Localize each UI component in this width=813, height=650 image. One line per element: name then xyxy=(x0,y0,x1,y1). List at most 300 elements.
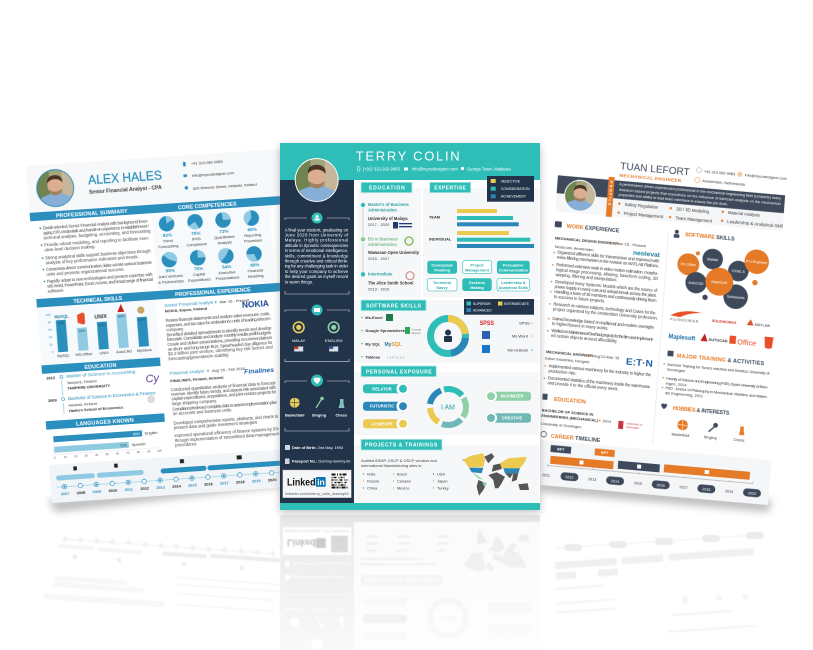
software list left: Google Spreadsheets xyxy=(365,328,407,333)
name: ALEX HALES xyxy=(88,167,163,187)
education timeline: The Alice Smith School xyxy=(368,280,413,285)
skill buttons: Making xyxy=(470,285,484,290)
software skills bubble chart: Ms Office xyxy=(680,262,696,267)
date of birth: Date of Birth: 2nd May. 1993 xyxy=(292,445,343,450)
career timeline chart: 2014 xyxy=(611,479,619,484)
software list right: Ms-Outlook xyxy=(508,348,528,352)
contact details: info@mycvdesigner.com xyxy=(192,170,234,178)
experience entries: large shipping company. xyxy=(172,398,217,406)
logo: Eaton: E:T·N xyxy=(626,356,653,369)
languages bar chart: 0 xyxy=(54,456,56,460)
hobbies icons: Chess xyxy=(733,437,745,443)
technical skills bar chart: 80 xyxy=(48,320,52,324)
software logos xyxy=(668,309,775,349)
career timeline heading: CAREER TIMELINE xyxy=(551,434,601,444)
core competencies labels: 55% xyxy=(165,268,175,273)
expertise bar chart xyxy=(429,209,534,248)
skill buttons: Thinking xyxy=(434,268,451,272)
career timeline chart: BFT xyxy=(601,451,609,455)
major training list xyxy=(661,361,770,404)
professional summary text: Consensus-driven communication, liaise across various business xyxy=(46,260,152,272)
career timeline: 2020 xyxy=(268,477,277,483)
icon: Outlook xyxy=(482,345,490,353)
software legend xyxy=(464,299,534,315)
contact details xyxy=(358,166,511,172)
reflected sidebar items: Singing xyxy=(312,608,327,612)
QR code xyxy=(331,473,348,489)
software skills tab: SOFTWARE SKILLS xyxy=(366,303,422,309)
work experience entries: production rate. xyxy=(548,368,577,376)
heading band: summary and competencies: CORE COMPETENCIES xyxy=(178,201,237,211)
education timeline: Intermediate xyxy=(368,272,393,277)
expertise legend xyxy=(487,176,534,202)
education timeline: Administration xyxy=(368,242,397,247)
career timeline xyxy=(49,448,306,503)
technical skills bar chart: AutoCAD xyxy=(116,349,132,354)
software skills tab xyxy=(361,300,426,311)
skill buttons: Management xyxy=(465,268,490,272)
projects text: Russia xyxy=(367,478,380,483)
shadow: left resume xyxy=(48,478,285,512)
page background xyxy=(505,146,793,505)
core competencies labels: Joint Ventures xyxy=(158,273,183,279)
hobbies icons: Basketball xyxy=(671,431,690,438)
technical skills bar chart: UNIX xyxy=(100,351,109,355)
page background xyxy=(26,149,306,503)
projects text: Turkey xyxy=(437,485,449,490)
core competencies labels: Expenditures xyxy=(188,276,211,283)
software logos: SOLIDWORKS xyxy=(712,319,737,325)
heading band: summary and competencies: PROFESSIONAL SUMMARY xyxy=(56,209,128,219)
reflected projects: USA xyxy=(437,549,445,554)
experience entries: expenses, and tax rates for ambivalence units of leading telecom xyxy=(166,316,271,328)
education timeline: 2015 - 2017 xyxy=(368,256,390,261)
education timeline xyxy=(361,202,420,292)
languages heading xyxy=(46,413,165,430)
software donut chart xyxy=(430,318,466,354)
contact details: George Town, Malaysia xyxy=(467,167,511,172)
skill buttons: Decision xyxy=(469,280,486,285)
technical skills bar chart: MS-Office xyxy=(75,352,92,357)
experience entries: Senior Financial Analyst xyxy=(164,300,214,308)
software list right: SPSS xyxy=(519,320,530,326)
education entries: 2009 xyxy=(48,397,58,403)
languages bar chart xyxy=(52,426,162,460)
education entry: 2014 xyxy=(602,418,612,424)
technical skills bar chart xyxy=(45,302,152,359)
hobbies icons: Singing xyxy=(704,434,717,440)
divider xyxy=(653,233,668,445)
personal traits right xyxy=(485,390,531,424)
career timeline: 2013 xyxy=(156,484,166,490)
icon: MySQL: MySQL xyxy=(54,313,69,319)
career timeline: 2009 xyxy=(92,489,102,494)
reflection: centre resume: PROJECTS & TRAININGS xyxy=(365,576,438,582)
sidebar languages section: MALAY xyxy=(292,338,306,343)
education entry: BACHELOR OF SCIENCE IN xyxy=(542,407,594,417)
skill buttons: Leadership & xyxy=(501,280,526,285)
photo xyxy=(295,158,339,202)
reflected map xyxy=(463,529,529,572)
profile tab xyxy=(606,177,615,217)
skill buttons: Communication xyxy=(499,268,529,272)
heading band: technical skills and experience xyxy=(36,282,291,308)
contact details xyxy=(182,157,257,191)
sidebar profile section: skills, commitment & knowledge xyxy=(285,253,349,258)
core competencies labels: 75% xyxy=(194,266,203,271)
icon: Office xyxy=(77,312,85,325)
expertise bar chart: INDIVIDUAL xyxy=(429,237,452,242)
core competencies labels: Analysis xyxy=(217,239,232,245)
projects and trainings tab xyxy=(361,439,442,450)
work experience entries: Performed extensive work in video motion estimation, morpho- xyxy=(556,262,659,276)
career timeline: 2016 xyxy=(204,481,214,487)
logo: university: Cy xyxy=(145,372,161,385)
experience entries: Financial Analyst xyxy=(169,369,205,376)
profile tab: PROFILE xyxy=(607,181,613,207)
LinkedIn box: linkedin.com/in/terry_colin_dummy00 xyxy=(286,492,349,496)
career timeline: 2019 xyxy=(252,478,262,484)
passport: Passport No.: Dummy.dummy.00 xyxy=(292,458,351,463)
skill buttons xyxy=(427,261,530,291)
core competencies labels: Modeling xyxy=(248,273,264,279)
languages bar chart: Spanish xyxy=(131,441,146,447)
photo xyxy=(563,178,597,213)
projects text: India xyxy=(367,471,376,476)
sidebar xyxy=(280,180,354,503)
languages bar chart: 85% xyxy=(133,432,140,436)
core competencies labels: 82% xyxy=(163,232,172,238)
career timeline: 2011 xyxy=(124,486,134,492)
core competencies pie charts xyxy=(155,207,263,271)
work experience entries: MECHANICAL ENGINEER xyxy=(546,349,594,358)
reflected projects: Mexico xyxy=(397,535,409,540)
major training list: Groningen xyxy=(667,366,686,373)
languages bar chart: 100 xyxy=(157,449,162,453)
projects and trainings tab: PROJECTS & TRAININGS xyxy=(365,443,438,449)
education heading xyxy=(41,357,161,374)
professional summary text: utive-level decision making. xyxy=(44,244,96,252)
sidebar hobbies section: Singing xyxy=(312,412,327,418)
job title: Senior Financial Analyst - CPA xyxy=(89,185,162,196)
work experience entries: Eaton Industries, Hengelo xyxy=(545,355,590,364)
projects text: Brazil xyxy=(397,471,407,476)
personal traits right: MAXIMIZER xyxy=(501,394,524,399)
reflected projects: Audited ASMP, OSCP & OSCP vendors and xyxy=(361,562,437,567)
reflected projects xyxy=(361,535,449,567)
education timeline: Wawasan Open University xyxy=(368,250,420,255)
skill buttons: Conceptual xyxy=(431,262,453,267)
major training list: Faculty of Science and Engineering (FSE); Kyoto University of Bren- xyxy=(666,376,769,390)
logo: Nokia: NOKIA xyxy=(242,299,269,310)
major training list: als Engineering, 2011 xyxy=(665,390,704,399)
software logos: AUTOCAD xyxy=(708,337,728,343)
projects text: Canada xyxy=(397,478,411,483)
software skills bubble chart: Matlab xyxy=(707,257,718,262)
sidebar profile section: attitude in dynamic consequencies xyxy=(285,243,348,248)
education timeline: 2017 - 2020 xyxy=(368,222,390,227)
core competencies labels: IFRS xyxy=(192,236,201,242)
work experience entries xyxy=(543,235,663,395)
reflected traits xyxy=(363,597,531,641)
reflected LinkedIn box: linkedin.com/in/terry_colin_dummy00 xyxy=(286,529,349,533)
software skills bubble chart: AutoCAD xyxy=(688,281,704,286)
sidebar profile section: Malaya. Highly professional xyxy=(285,238,348,243)
shadow: centre resume xyxy=(280,146,540,512)
LinkedIn box xyxy=(283,470,351,498)
software list left xyxy=(361,314,422,360)
software skills bubble chart: HTML 5 xyxy=(732,269,745,274)
work experience entries: logical image processing, aliasing, baseform coding, 2D xyxy=(556,267,658,281)
work experience entries: to success in future projects. xyxy=(554,294,606,304)
core competencies labels: Trend xyxy=(163,238,173,244)
personal traits left: FUTURISTIC xyxy=(370,404,394,409)
logo: University of Malaya xyxy=(393,222,412,228)
sidebar hobbies section: Basketball xyxy=(285,412,304,418)
skill buttons: Savvy xyxy=(436,285,448,290)
software list right: Ms-Word xyxy=(512,334,528,338)
languages bar chart: 20 xyxy=(74,454,78,458)
software logos: Pro/ENGINEER xyxy=(670,317,699,324)
logo: school xyxy=(147,395,155,403)
education entries: Helsinki, Finland xyxy=(68,401,97,408)
software list right xyxy=(480,320,533,353)
software skills bubble chart: Pro Engineer xyxy=(746,259,768,265)
key skills list: Team Management xyxy=(675,215,713,223)
career timeline: 2014 xyxy=(172,483,182,489)
professional summary text: units and promote organizational success. xyxy=(46,267,125,277)
education timeline: University of Malaya xyxy=(368,216,408,221)
software skills heading xyxy=(674,230,735,243)
personal traits left: ACHIEVER xyxy=(371,421,393,426)
professional summary text: Strong analytical skills support business objectives through xyxy=(45,248,152,260)
major training list: PhD - Doctor of Philosophy in Mechanical, Maritime and Materi- xyxy=(665,385,768,399)
icon: Google Sheets: Google xyxy=(412,328,422,332)
professional summary text: MS Word, PowerPoint, Excel, Access, and broad range of financial xyxy=(47,277,153,289)
education heading: EDUCATION xyxy=(84,363,117,371)
work experience entries: power supply in every cost and unload-break across the plant. xyxy=(555,284,657,298)
key skills list xyxy=(617,200,784,230)
work experience entries: Aug'12-Mar '15 xyxy=(593,353,620,360)
work experience heading xyxy=(554,221,620,235)
core competencies labels: Executive xyxy=(219,269,236,275)
skill buttons: Analytical Skills xyxy=(498,285,528,290)
work experience entries: and provide it to the official every week. xyxy=(547,380,619,392)
profile band: research based projects that executives on the influence of lubricant analysis on the mechanical xyxy=(619,188,781,206)
experience entries: on short- and long-range BUs. Spearheaded due diligence for xyxy=(168,340,273,352)
education heading: EDUCATION xyxy=(554,397,586,406)
name: TUAN LEFORT xyxy=(620,161,691,179)
professional summary text: analysis of key performance indicators and trends. xyxy=(45,254,139,265)
core competencies labels xyxy=(155,226,265,285)
core competencies labels: 54% xyxy=(222,264,231,270)
career timeline chart xyxy=(505,437,771,505)
core competencies labels: Compliance xyxy=(186,241,207,247)
experience entries: NOKIA, Espoo, Finland xyxy=(165,306,208,314)
core competencies labels: Processes xyxy=(244,237,262,244)
career timeline chart: 2012 xyxy=(565,475,574,480)
logo: university xyxy=(618,421,642,431)
experience entries: company. xyxy=(166,326,184,333)
software skills bubble chart xyxy=(674,243,770,312)
major training list: Summer Training for Tuna's machine and Kinetics; University of xyxy=(667,362,770,376)
logo: Alice Smith xyxy=(406,272,414,280)
experience entries: Create and deliver presentations, providing recommendations xyxy=(167,335,272,347)
reflected LinkedIn box xyxy=(283,527,351,555)
icon: Excel xyxy=(386,314,393,321)
projects text: Audited ASMP, OSCP & OSCP vendors and xyxy=(361,458,437,463)
logo: Finalines: Finalines xyxy=(244,368,275,376)
sidebar hobbies section: Chess xyxy=(335,412,347,418)
projects text: USA xyxy=(437,471,445,476)
software logos: MATLAB xyxy=(754,322,771,328)
experience entries: Conducted quantitative analysis of financial data to forecast xyxy=(171,380,276,392)
languages heading: LANGUAGES KNOWN xyxy=(76,418,134,428)
education tab: EDUCATION xyxy=(369,185,405,191)
education heading xyxy=(542,394,586,406)
work experience entries: noise-filtering mechanism in the revision on MATLAB Platform. xyxy=(557,255,659,269)
contact details: info@mycvdesigner.com xyxy=(412,167,458,172)
technical skills bar chart: 0 xyxy=(52,350,54,354)
icon: AutoCAD xyxy=(117,304,124,312)
projects text: Japan xyxy=(437,478,448,483)
work experience entries: to higher/issues in many works. xyxy=(552,321,609,331)
technical skills bar chart: 100 xyxy=(45,313,51,317)
technical skills bar chart: 80% xyxy=(118,314,125,319)
skill buttons: Persuasive xyxy=(503,262,524,267)
experience entries: Benefited detailed spreadsheets to identify trends and develop xyxy=(166,325,272,337)
reflected projects: International Manufacturing sites in: xyxy=(361,557,422,562)
centre resume: Terry Colin xyxy=(280,143,540,510)
sidebar profile section: A final year student, graduating on xyxy=(285,227,349,232)
work experience entries: Neoto-tan, Amsterdam xyxy=(555,244,594,252)
experience entries: forecasting/generates/m stability. xyxy=(168,352,229,361)
reflection: left resume xyxy=(44,536,280,612)
technical skills bar chart: 20 xyxy=(49,343,53,347)
education entries: Bachelor of Science in Economics & Finance xyxy=(68,390,156,402)
languages bar chart: 60 xyxy=(116,451,120,456)
experience entries: Developed comprehensive reports, abstracts, and charts to xyxy=(173,413,279,425)
header background xyxy=(26,149,284,213)
technical skills bar chart: MySQL xyxy=(57,353,70,358)
job title: MECHANICAL ENGINEER xyxy=(619,173,682,183)
career timeline: 2018 xyxy=(236,479,246,485)
major training list: ingen, 2014 xyxy=(666,380,687,387)
experience entries: $3.2-billion joint venture, identifying key risk factors and xyxy=(168,344,274,356)
key skills list: 2D / 3D Modeling xyxy=(676,206,710,214)
core competencies labels: Reporting xyxy=(244,232,261,238)
icon: MySQL: MySQL xyxy=(384,342,402,348)
reflected sidebar items: Basketball xyxy=(285,608,304,612)
expertise tab xyxy=(430,182,471,193)
contact details xyxy=(695,167,787,190)
left resume: Alex Hales xyxy=(26,149,306,503)
software skills bubble chart: Maplesoft xyxy=(711,280,727,285)
professional summary text: aging CPA credentials and hands-on experience in establishment / xyxy=(43,223,150,235)
work experience entries: project organized by the Amsterdam University profession. xyxy=(553,306,658,320)
sidebar profile section: June 2020 from University of xyxy=(285,232,349,238)
experience entries xyxy=(164,296,281,448)
languages bar chart: 10 xyxy=(64,455,67,459)
icon: Google Sheets xyxy=(405,327,422,335)
right resume: Tuan Lefort xyxy=(505,146,793,505)
career timeline chart: BFT xyxy=(557,447,565,452)
key skills list: Project Management xyxy=(624,211,664,219)
skill buttons: Technical xyxy=(433,280,451,285)
career timeline chart: 2015 xyxy=(634,481,642,486)
reflected sidebar items: Chess xyxy=(335,608,347,612)
reflected LinkedIn box: Linked xyxy=(287,536,316,548)
LinkedIn box: in xyxy=(317,477,325,487)
experience entries: procedures. xyxy=(175,441,197,448)
work experience entries: Organized different skills for transmission and impinned with xyxy=(557,250,660,264)
skill buttons: Project xyxy=(470,262,484,267)
page background xyxy=(280,143,540,510)
career timeline chart: 2011 xyxy=(542,473,550,478)
software list right: SPSS xyxy=(480,321,494,327)
languages bar chart: English xyxy=(145,430,158,436)
career timeline chart: 2019 xyxy=(725,489,733,494)
profile band: A performance driven experienced professional in the mechanical engineering field (complete) many xyxy=(619,182,781,201)
work experience entries: Research on various subjects, technology and Cases for the xyxy=(553,301,656,315)
languages bar chart: 70 xyxy=(126,451,130,455)
header band xyxy=(280,143,540,180)
core competencies labels: Forecasting xyxy=(158,243,179,249)
software logos: Maplesoft xyxy=(668,333,696,343)
career timeline chart: 2018 xyxy=(702,487,711,492)
sidebar profile section: to help your company to achieve xyxy=(285,269,349,274)
projects text xyxy=(361,458,449,490)
projects text: China xyxy=(367,485,378,490)
logo: university: groningen xyxy=(626,425,640,430)
experience entries: Review financial statements and analyze sales revenues, costs, xyxy=(165,311,270,323)
experience entries: Improved operational efficiency of finance systems by 5% xyxy=(174,426,279,438)
career timeline chart: 2017 xyxy=(679,485,688,490)
experience entries: forecasts. Consolidate and analyze monthly results profit-budgets. xyxy=(167,330,272,342)
education entries xyxy=(46,367,163,415)
icon: professional xyxy=(444,330,452,342)
contact details: +91 313 082 9083 xyxy=(704,169,735,176)
experience entries: Mar '16 - Present xyxy=(219,297,250,304)
I AM donut chart xyxy=(430,389,466,425)
contact details: (+91) 313-202-9083 xyxy=(363,167,401,172)
experience entries: Aug '15 - Feb 2016 xyxy=(212,366,245,373)
languages bar chart: 30 xyxy=(84,453,88,458)
core competencies labels: Financial xyxy=(247,267,263,273)
work experience entries: MECHANICAL DESIGN ENGINEER xyxy=(555,236,618,246)
software list left: Tableau xyxy=(365,355,381,360)
education tab xyxy=(361,182,412,193)
reflected projects: Japan xyxy=(437,542,448,547)
personal exposure tab xyxy=(361,366,436,377)
languages bar chart: 50 xyxy=(105,452,109,456)
personal traits right: CREATIVE xyxy=(502,416,522,420)
software logos: Office xyxy=(737,337,757,348)
sidebar profile section: in terms of emotional Intelligence, xyxy=(285,248,348,253)
education entries: Tampere, Finland xyxy=(67,378,97,385)
languages bar chart: 72% xyxy=(120,443,127,448)
career timeline: 2012 xyxy=(140,485,149,491)
hobbies heading xyxy=(661,403,730,417)
experience entries: on accounts and business units. xyxy=(173,407,232,416)
core competencies labels: Quantitative xyxy=(214,234,235,240)
profile band: properties and ability to lead team members to ensure the job done. xyxy=(618,193,728,206)
name: TERRY COLIN xyxy=(356,149,460,164)
LinkedIn box: Linked xyxy=(287,478,316,488)
expertise legend: OBJECTIVE xyxy=(501,180,521,184)
sidebar profile section: through creative and critical think- xyxy=(285,258,349,264)
sidebar languages section xyxy=(285,304,349,362)
